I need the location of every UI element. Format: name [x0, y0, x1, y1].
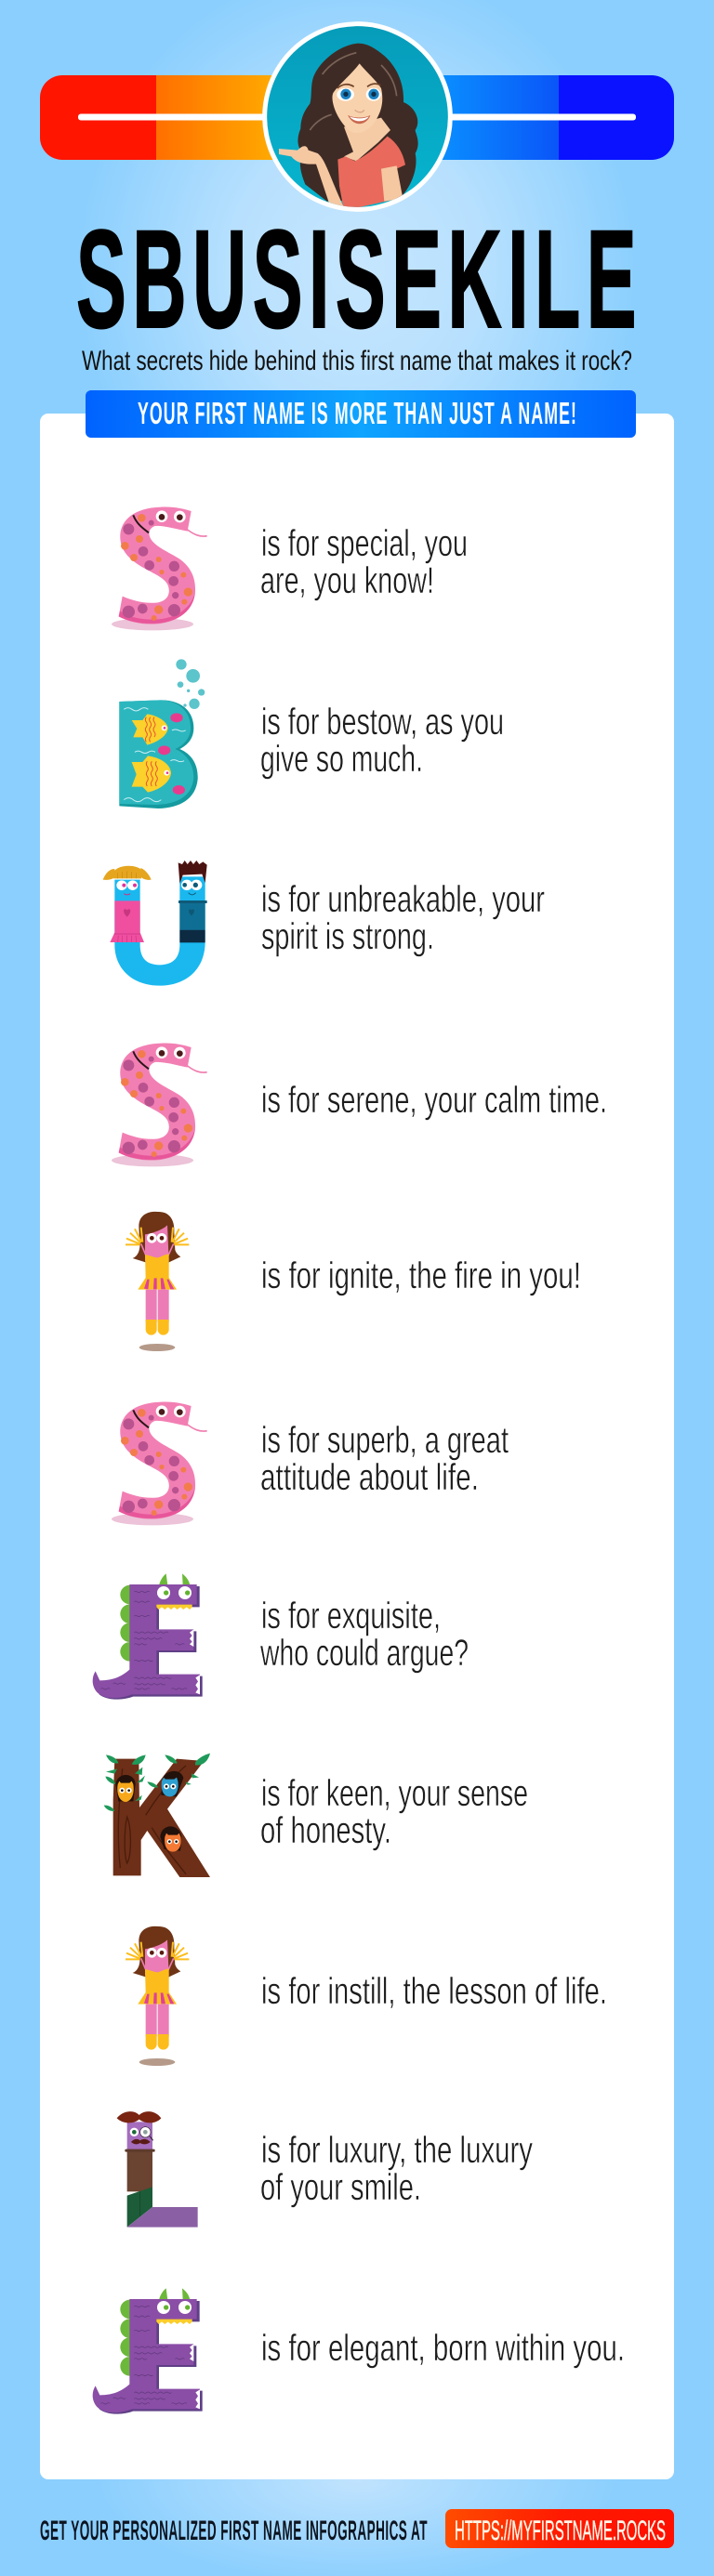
text: K line: of honesty. [260, 1810, 391, 1851]
footer url button [445, 2509, 674, 2548]
avatar: woman in circle [262, 21, 453, 212]
text: K line: is for keen, your sense [261, 1773, 528, 1814]
text: L line: is for luxury, the luxury [261, 2130, 533, 2171]
header colour bar [40, 75, 674, 160]
icon: snake letter S [112, 1402, 207, 1525]
icon: tree and owls letter K [104, 1754, 210, 1877]
text: E line [259, 1596, 469, 1674]
text: B line: give so much. [260, 739, 423, 780]
text: S line: is for superb, a great [261, 1420, 509, 1461]
content panel [40, 414, 674, 2479]
text: E line: is for exquisite, [261, 1596, 441, 1636]
neck and chest [344, 118, 390, 161]
text: S line [260, 1420, 509, 1498]
text: U line: spirit is strong. [261, 916, 434, 957]
text: L line: of your smile. [260, 2167, 421, 2208]
text: S line: attitude about life. [260, 1457, 479, 1498]
text: E line: who could argue? [259, 1633, 469, 1674]
text: K line [260, 1773, 528, 1851]
icon: gentleman letter L [117, 2111, 198, 2228]
icon: snake letter S [112, 507, 207, 630]
icon: fish letter B [119, 659, 205, 808]
face [332, 63, 382, 133]
text: U line: is for unbreakable, your [261, 879, 545, 920]
text: S line: are, you know! [260, 560, 434, 601]
icon: cheerleader letter I [126, 1926, 189, 2066]
text: S line [260, 523, 468, 601]
text: B line: is for bestow, as you [261, 702, 504, 743]
text: L line [260, 2130, 533, 2208]
icon: snake letter S [112, 1044, 207, 1166]
text: U line [261, 879, 545, 957]
icon: cheerleader letter I [126, 1212, 189, 1351]
shirt [337, 137, 405, 211]
hair [298, 44, 418, 202]
banner [86, 390, 636, 438]
icon: dinosaur letter E [93, 2288, 203, 2414]
icon: dinosaur letter E [93, 1573, 203, 1700]
arm and hand [279, 146, 344, 207]
text: S line: is for special, you [261, 523, 468, 564]
text: B line [260, 702, 504, 780]
text: I line: is for ignite, the fire in you! [261, 1255, 581, 1296]
icon: couple letter U [103, 861, 207, 986]
